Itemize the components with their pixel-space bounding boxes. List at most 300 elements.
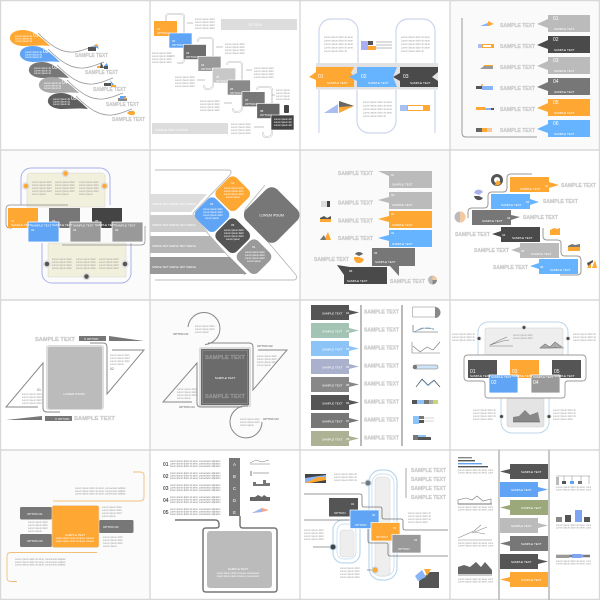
text blocks and connectors: Lorem ipsum dolor (254, 73, 274, 76)
teardrop 03 dark grey (29, 62, 113, 84)
diamond 03 dark: Lorem ipsum dolor (224, 235, 244, 238)
diamond 04 grey: Lorem ipsum dolor (245, 251, 265, 254)
vertical rules (361, 305, 402, 446)
teardrop 04 grey (39, 77, 123, 99)
text blocks and connectors: Lorem ipsum dolor (175, 85, 195, 88)
flags: SAMPLE TEXT (554, 27, 575, 31)
diamond 01 orange: Lorem ipsum dolor (224, 187, 244, 190)
cream text columns: Lorem ipsum dolor (76, 261, 96, 264)
central square (199, 347, 251, 407)
text blocks: Lorem ipsum dolor (304, 532, 324, 535)
arrow 03: SAMPLE TEXT (410, 81, 431, 85)
teardrop 04 grey: Lorem ipsum do (44, 85, 62, 88)
grey banners (152, 19, 297, 134)
teardrop 02 blue: Lorem ipsum do (25, 56, 43, 59)
labels and copy: Lorem ipsum (110, 363, 124, 366)
node dots (313, 480, 378, 573)
arrow 03: 03 (403, 74, 409, 80)
text blocks: Lorem ipsum dolor (304, 538, 324, 541)
list text: Lorem ipsum dolor sit amet, consectetur adipiscin (170, 486, 221, 490)
headings (75, 53, 145, 123)
option cards: OPTION (245, 102, 257, 106)
pie squares icon (415, 569, 439, 588)
tabs: 03 (346, 347, 350, 351)
arch frames (319, 19, 435, 133)
grey bars: SAMPLE TEXT SAMPLE TEXT SAMPLE (152, 245, 196, 248)
headings: SAMPLE TEXT (338, 200, 373, 206)
grey option bars: OPTION 01 (27, 512, 43, 516)
flags: SAMPLE TEXT (554, 90, 575, 94)
arrow tabs: SAMPLE TEXT (511, 560, 532, 564)
teardrop 03 dark grey: Lorem ipsum do (34, 70, 52, 73)
option cards: 07 (245, 98, 249, 102)
orange square: SAMPLE TEXT (65, 533, 85, 537)
flags: SAMPLE TEXT (554, 111, 575, 115)
headings: SAMPLE TEXT (364, 328, 399, 334)
big diamond: LOREM IPSUM (259, 214, 284, 218)
central square: SAMPLE TEXT (215, 376, 235, 380)
flags: 01 (553, 16, 559, 22)
cream text columns: Lorem ipsum (32, 193, 46, 196)
flags (537, 15, 590, 137)
headings: SAMPLE TEXT (314, 257, 349, 263)
copy blocks: Lorem ipsum dolor (102, 509, 122, 512)
side text: Lorem ipsum dolor sit (452, 333, 475, 336)
option boxes: 03 (512, 369, 518, 375)
headings: SAMPLE TEXT (474, 248, 509, 254)
text blocks: Lorem ipsum dolor sit amet (401, 36, 430, 39)
flags: SAMPLE TEXT (554, 132, 575, 136)
text blocks: Lorem ipsum dolor sit amet (363, 101, 392, 104)
mini icons (476, 21, 494, 132)
grey square: Lorem ipsum dolor sit amet, consectetur (217, 575, 259, 578)
option boxes (468, 360, 581, 393)
text blocks and connectors: Lorem ipsum dolor (152, 55, 172, 58)
arrow 02: 02 (361, 74, 367, 80)
teardrop 05 darkest: Lorem ipsum do (53, 98, 71, 101)
text blocks and connectors: Lorem ipsum dolor (200, 109, 220, 112)
grey option bars: OPTION 03 (27, 539, 43, 543)
side text: Lorem ipsum dolor sit (473, 415, 496, 418)
flags: 05 (374, 251, 378, 255)
letter column (229, 458, 240, 516)
option cards: OPTION (186, 55, 198, 59)
cream text columns: Lorem ipsum dolor (99, 261, 119, 264)
list text (170, 460, 221, 516)
boxes: 05 (95, 219, 99, 223)
copy blocks: Lorem ipsum dolor (102, 506, 122, 509)
boxes: 01 (11, 219, 15, 223)
text blocks and connectors: Lorem ipsum dolor (195, 24, 215, 27)
side text: Lorem ipsum dolor sit (573, 333, 596, 336)
headings: SAMPLE TEXT (390, 279, 425, 285)
mini charts: Lorem ipsum dolor (513, 334, 533, 337)
numbers: 05 (163, 510, 169, 516)
left captions: Lorem ipsum dolor sit amet, cons (458, 544, 494, 548)
headings: SAMPLE TEXT (93, 87, 126, 93)
option cards: 01 (157, 27, 161, 31)
diamond 03 dark (213, 216, 252, 255)
option cards: OPTION (260, 113, 272, 117)
boxes: SAMPLE TEXT (115, 224, 136, 228)
arrows: 02 (526, 200, 530, 204)
option boxes: SAMPLE TEXT (554, 374, 575, 378)
flags: 02 (391, 193, 395, 197)
mini bar (400, 105, 430, 111)
blue loops (333, 470, 397, 580)
grey square: SAMPLE TEXT (228, 567, 248, 571)
headings (500, 23, 535, 134)
teardrop 02 blue: Lorem ipsum do (25, 54, 43, 57)
mini charts (250, 460, 270, 513)
big diamond (241, 184, 303, 246)
serpentine loops (166, 14, 272, 137)
headings (314, 171, 425, 285)
arrow tabs: SAMPLE TEXT (511, 524, 532, 528)
headings: SAMPLE TEXT (364, 364, 399, 370)
diamond 04 grey (234, 237, 274, 276)
text blocks and connectors: Lorem ipsum dolor (152, 61, 172, 64)
diamond 02 blue (192, 195, 232, 234)
diamond 04 grey: Lorem ipsum (247, 260, 261, 263)
panel: teardrop list (10, 30, 145, 123)
text blocks and connectors: Lorem ipsum dolor (200, 106, 220, 109)
text blocks and connectors: Lorem ipsum dolor (175, 79, 195, 82)
text blocks and connectors: Lorem ipsum dolor (195, 18, 215, 21)
tabs: 08 (346, 437, 350, 441)
headings: SAMPLE TEXT (455, 232, 490, 238)
cream text columns: Lorem ipsum dolor (79, 181, 99, 184)
cream text columns: Lorem ipsum dolor (52, 261, 72, 264)
copy blocks: Lorem ipsum dolor (102, 512, 122, 515)
cream text columns: Lorem ipsum dolor (76, 264, 96, 267)
grey insets (485, 328, 563, 427)
headings: SAMPLE TEXT (500, 65, 535, 71)
text blocks (177, 325, 277, 427)
headings: SAMPLE TEXT (500, 23, 535, 29)
option boxes: 05 (554, 369, 560, 375)
text blocks: Lorem ipsum dolor sit (334, 479, 357, 482)
panel: diamonds and grey bars (150, 170, 303, 280)
list text: Lorem ipsum dolor sit amet, consectetur adipiscin (170, 489, 221, 492)
diamond 02 blue: Lorem ipsum (205, 217, 219, 220)
thick frame line (175, 516, 277, 592)
top row (35, 336, 144, 343)
cream text columns: Lorem ipsum dolor (32, 184, 52, 187)
option cards: 02 (172, 39, 176, 43)
orange square: Lorem ipsum dolor sit amet, consect (56, 540, 95, 543)
bottom row: X OPTION (55, 417, 69, 421)
option cards: 03 (186, 51, 190, 55)
grey tracks (340, 477, 390, 576)
option boxes: 04 (533, 380, 539, 386)
diamond 03 dark: Lorem ipsum (226, 238, 240, 241)
teardrop 04 grey: Lorem ipsum do (44, 82, 62, 85)
side text: Lorem ipsum dolor sit (473, 409, 496, 412)
headings: SAMPLE TEXT (106, 102, 139, 108)
grey square (207, 531, 272, 588)
bottom row: SAMPLE TEXT (74, 416, 115, 422)
option cards: 06 (230, 87, 234, 91)
option cards: OPTION (216, 79, 228, 83)
arrow tabs: SAMPLE TEXT (511, 488, 532, 492)
side text: Lorem ipsum dolor (473, 418, 493, 421)
left captions: Lorem ipsum dolor sit amet, cons (458, 469, 494, 472)
text blocks and connectors: Lorem ipsum dolor (152, 52, 172, 55)
text blocks: Lorem ipsum (195, 331, 209, 334)
step cards: 01 (351, 502, 355, 506)
option boxes: SAMPLE TEXT (470, 374, 491, 378)
tabs: SAMPLE TEXT (322, 438, 343, 442)
cream text columns: Lorem ipsum dolor (99, 264, 119, 267)
side text: Lorem ipsum dolor sit (473, 412, 496, 415)
text blocks: Lorem ipsum (257, 364, 271, 367)
text blocks and connectors: Lorem ipsum dolor (231, 132, 251, 135)
text blocks: Lorem ipsum dolor sit amet (324, 36, 353, 39)
text blocks (324, 36, 430, 118)
side text (452, 333, 596, 421)
teardrop 01 orange: Lorem ipsum do (15, 35, 33, 38)
arrow 03 (393, 67, 438, 87)
mini chart triangles (324, 101, 354, 113)
grey option bars (20, 507, 134, 547)
cream text columns: Lorem ipsum dolor (52, 267, 72, 270)
list text: Lorem ipsum dolor sit amet, consectetur adipiscin (170, 460, 221, 463)
text blocks: Lorem ipsum dolor (340, 573, 360, 576)
diamond 03 dark: Lorem ipsum dolor (224, 229, 244, 232)
option boxes: SAMPLE TEXT (491, 375, 512, 379)
copy blocks: Lorem ipsum dolor (28, 524, 48, 527)
side text: Lorem ipsum dolor sit (573, 339, 596, 342)
option cards: Lorem ipsum dol (274, 124, 292, 127)
panel: winding track (304, 468, 448, 588)
step cards: OPTION (398, 547, 410, 551)
arrows: 03 (507, 216, 511, 220)
letter column: D (233, 498, 237, 503)
text blocks and connectors: Lorem ipsum dolor (200, 103, 220, 106)
right captions: Lorem ipsum dolor sit amet, cons (556, 526, 592, 530)
headings: SAMPLE TEXT (112, 117, 145, 123)
text blocks: Lorem ipsum (177, 397, 191, 400)
headings: SAMPLE TEXT (493, 265, 528, 271)
text blocks: Lorem ipsum dolor sit amet (363, 112, 392, 114)
cream text columns: Lorem ipsum dolor (99, 267, 119, 270)
diamond 04 grey: Lorem ipsum dolor (245, 257, 265, 260)
mini icons (454, 174, 597, 268)
list text: Lorem ipsum dolor sit amet, consectetur adipiscin (170, 484, 221, 487)
flags: SAMPLE TEXT (554, 69, 575, 73)
list text: Lorem ipsum dolor sit amet, consectetur adipiscin (170, 513, 221, 516)
panel: cream cards with six boxes (6, 168, 145, 283)
option labels: OPTION 01 (173, 332, 189, 336)
top row: X OPTION (84, 337, 98, 341)
arrows: 05 (521, 249, 525, 253)
teardrop 05 darkest (48, 93, 132, 115)
step cards: 04 (414, 538, 418, 542)
mini charts: Lorem ipsum dolor (513, 337, 533, 340)
headings: SAMPLE TEXT (338, 218, 373, 224)
text blocks: Lorem ipsum dolor sit (324, 50, 347, 53)
band (316, 63, 438, 90)
text blocks: Lorem ipsum dolor sit amet (363, 104, 392, 108)
panel: stepped arrows (454, 174, 597, 275)
flags: SAMPLE TEXT (554, 48, 575, 52)
blue frames (21, 168, 131, 283)
cream text columns: Lorem ipsum dolor (76, 267, 96, 270)
tabs: SAMPLE TEXT (322, 312, 343, 316)
left captions: Lorem ipsum dolor sit amet, cons (458, 472, 494, 474)
text blocks and connectors: Lorem ipsum dolor (195, 21, 215, 24)
flags: 04 (553, 79, 559, 85)
left captions: Lorem ipsum dolor sit amet, cons (458, 506, 494, 509)
arrows: SAMPLE TEXT (550, 268, 571, 272)
mini icons (88, 44, 135, 115)
teardrop 05 darkest: Lorem ipsum do (53, 101, 71, 104)
cream text columns: Lorem ipsum dolor (55, 187, 75, 190)
flags: 05 (553, 100, 559, 106)
text blocks and connectors: Lorem ipsum dolor (152, 58, 172, 61)
arrow 01: SAMPLE TEXT (327, 81, 348, 85)
arrow tabs (500, 464, 548, 587)
option cards: Lorem ipsum dol (274, 121, 292, 124)
text blocks and connectors: Lorem ipsum dolor (175, 76, 195, 79)
boxes: 03 (52, 219, 56, 223)
text blocks: Lorem ipsum dolor sit (401, 50, 424, 53)
left captions: Lorem ipsum dolor sit amet, cons (458, 578, 494, 581)
mini charts (412, 307, 440, 440)
arrow tabs: SAMPLE TEXT (521, 506, 542, 510)
side headings: SAMPLE TEXT (411, 477, 446, 483)
cream text columns: Lorem ipsum dolor (52, 258, 72, 261)
list text: Lorem ipsum dolor sit amet, consectetur adipiscin (170, 465, 221, 468)
tabs (311, 305, 359, 446)
option labels: OPTION 03 (263, 417, 279, 421)
panel: speech flags (314, 171, 437, 285)
list text: Lorem ipsum dolor sit amet, consectetur adipiscin (170, 508, 221, 511)
side headings: SAMPLE TEXT (411, 486, 446, 492)
option cards (154, 21, 294, 130)
headings (364, 310, 399, 442)
side text: Lorem ipsum dolor sit (553, 409, 576, 412)
copy blocks (15, 487, 126, 567)
arrows: 04 (502, 233, 506, 237)
grey banners: SAMPLE TEXT OPTION (155, 128, 188, 132)
arrow 02 (349, 67, 397, 87)
right captions: Lorem ipsum dolor sit amet, cons (556, 488, 592, 492)
diamond 01 orange: Lorem ipsum (226, 196, 240, 199)
text blocks and connectors: Lorem ipsum (276, 92, 290, 95)
boxes: 04 (73, 228, 77, 232)
tabs: SAMPLE TEXT (322, 366, 343, 370)
labels and copy: 02 (110, 367, 114, 371)
central square: SAMPLE TEXT (205, 355, 245, 361)
copy blocks: Lorem ipsum (28, 530, 42, 533)
text blocks: Lorem ipsum dolor (257, 361, 277, 364)
tabs: 01 (346, 311, 350, 315)
panel: dark square with arcs (163, 313, 287, 438)
teardrop 01 orange: Lorem ipsum do (15, 40, 33, 43)
copy blocks: Lorem ipsum dolor (103, 539, 123, 542)
list text: Lorem ipsum dolor sit amet, consectetur adipiscin (170, 474, 221, 478)
panel: six flags with curved line (462, 15, 590, 137)
text blocks: Lorem ipsum dolor (195, 328, 215, 331)
arrows: SAMPLE TEXT (512, 236, 533, 240)
side text: Lorem ipsum dolor sit (452, 339, 475, 342)
side headings: SAMPLE TEXT (411, 468, 446, 474)
text blocks: Lorem ipsum dolor sit amet (401, 43, 430, 46)
left charts (458, 457, 492, 576)
headings: SAMPLE TEXT (338, 236, 373, 242)
option labels (173, 332, 279, 421)
right captions: Lorem ipsum dolor sit amet, cons (556, 486, 592, 489)
option cards: OPTION (201, 67, 213, 71)
tabs: SAMPLE TEXT (322, 402, 343, 406)
grey square: Lorem ipsum dolor sit amet, consectetur (217, 572, 259, 575)
text blocks and connectors: Lorem ipsum dolor (225, 43, 245, 46)
left captions: Lorem ipsum dolor sit amet, cons (458, 508, 494, 512)
arrows (472, 177, 578, 274)
arrow 01: 01 (318, 74, 324, 80)
labels and copy: Lorem ipsum dolor (22, 396, 42, 399)
copy blocks: Lorem ipsum dolor (103, 536, 123, 539)
boxes: 06 (115, 228, 119, 232)
arrows: SAMPLE TEXT (531, 252, 552, 256)
labels and copy: Lorem ipsum dolor (110, 357, 130, 360)
boxes: 02 (31, 228, 35, 232)
side text: Lorem ipsum dolor (553, 418, 573, 421)
labels and copy: 01 (37, 388, 41, 392)
teardrop 05 darkest: 05 (71, 96, 77, 102)
boxes: SAMPLE TEXT (95, 223, 116, 227)
copy blocks: Lorem ipsum dolor sit amet, consectetur adipisc (15, 561, 66, 564)
copy blocks: Lorem ipsum dolor (103, 542, 123, 545)
copy blocks: Lorem ipsum dolor (28, 527, 48, 530)
boxes: SAMPLE TEXT (73, 224, 94, 228)
cream text columns: Lorem ipsum dolor (55, 184, 75, 187)
boxes: SAMPLE TEXT (52, 223, 73, 227)
grey banners: OPTION (248, 23, 262, 27)
option cards: Lorem ipsum dol (274, 118, 292, 121)
stepped lines (468, 174, 581, 275)
text blocks and connectors: Lorem ipsum dolor (225, 52, 245, 55)
tabs: SAMPLE TEXT (322, 384, 343, 388)
teardrop 03 dark grey: 03 (52, 65, 58, 71)
cream text columns: Lorem ipsum dolor (32, 190, 52, 193)
cream text columns: Lorem ipsum (79, 193, 93, 196)
option cards: OPTION (230, 91, 242, 95)
flags (337, 171, 432, 284)
text blocks and connectors (152, 18, 290, 135)
cream text columns: Lorem ipsum (55, 193, 69, 196)
labels and copy: Lorem ipsum dolor (110, 360, 130, 363)
tabs: SAMPLE TEXT (322, 348, 343, 352)
teardrop 04 grey: Lorem ipsum do (44, 87, 62, 90)
tabs: 05 (346, 383, 350, 387)
tabs: 07 (346, 419, 350, 423)
flags: 06 (349, 269, 353, 273)
headings: SAMPLE TEXT (338, 171, 373, 177)
headings: SAMPLE TEXT (500, 107, 535, 113)
circles and triangle lines (163, 313, 287, 438)
letter column: E (233, 510, 236, 515)
tabs: SAMPLE TEXT (322, 330, 343, 334)
central square: SAMPLE TEXT (205, 394, 245, 400)
flags: 06 (553, 121, 559, 127)
flags: SAMPLE TEXT (347, 279, 368, 283)
text blocks: Lorem ipsum dolor (257, 355, 277, 358)
cream panels (27, 173, 126, 277)
cream text columns: Lorem ipsum dolor (76, 258, 96, 261)
